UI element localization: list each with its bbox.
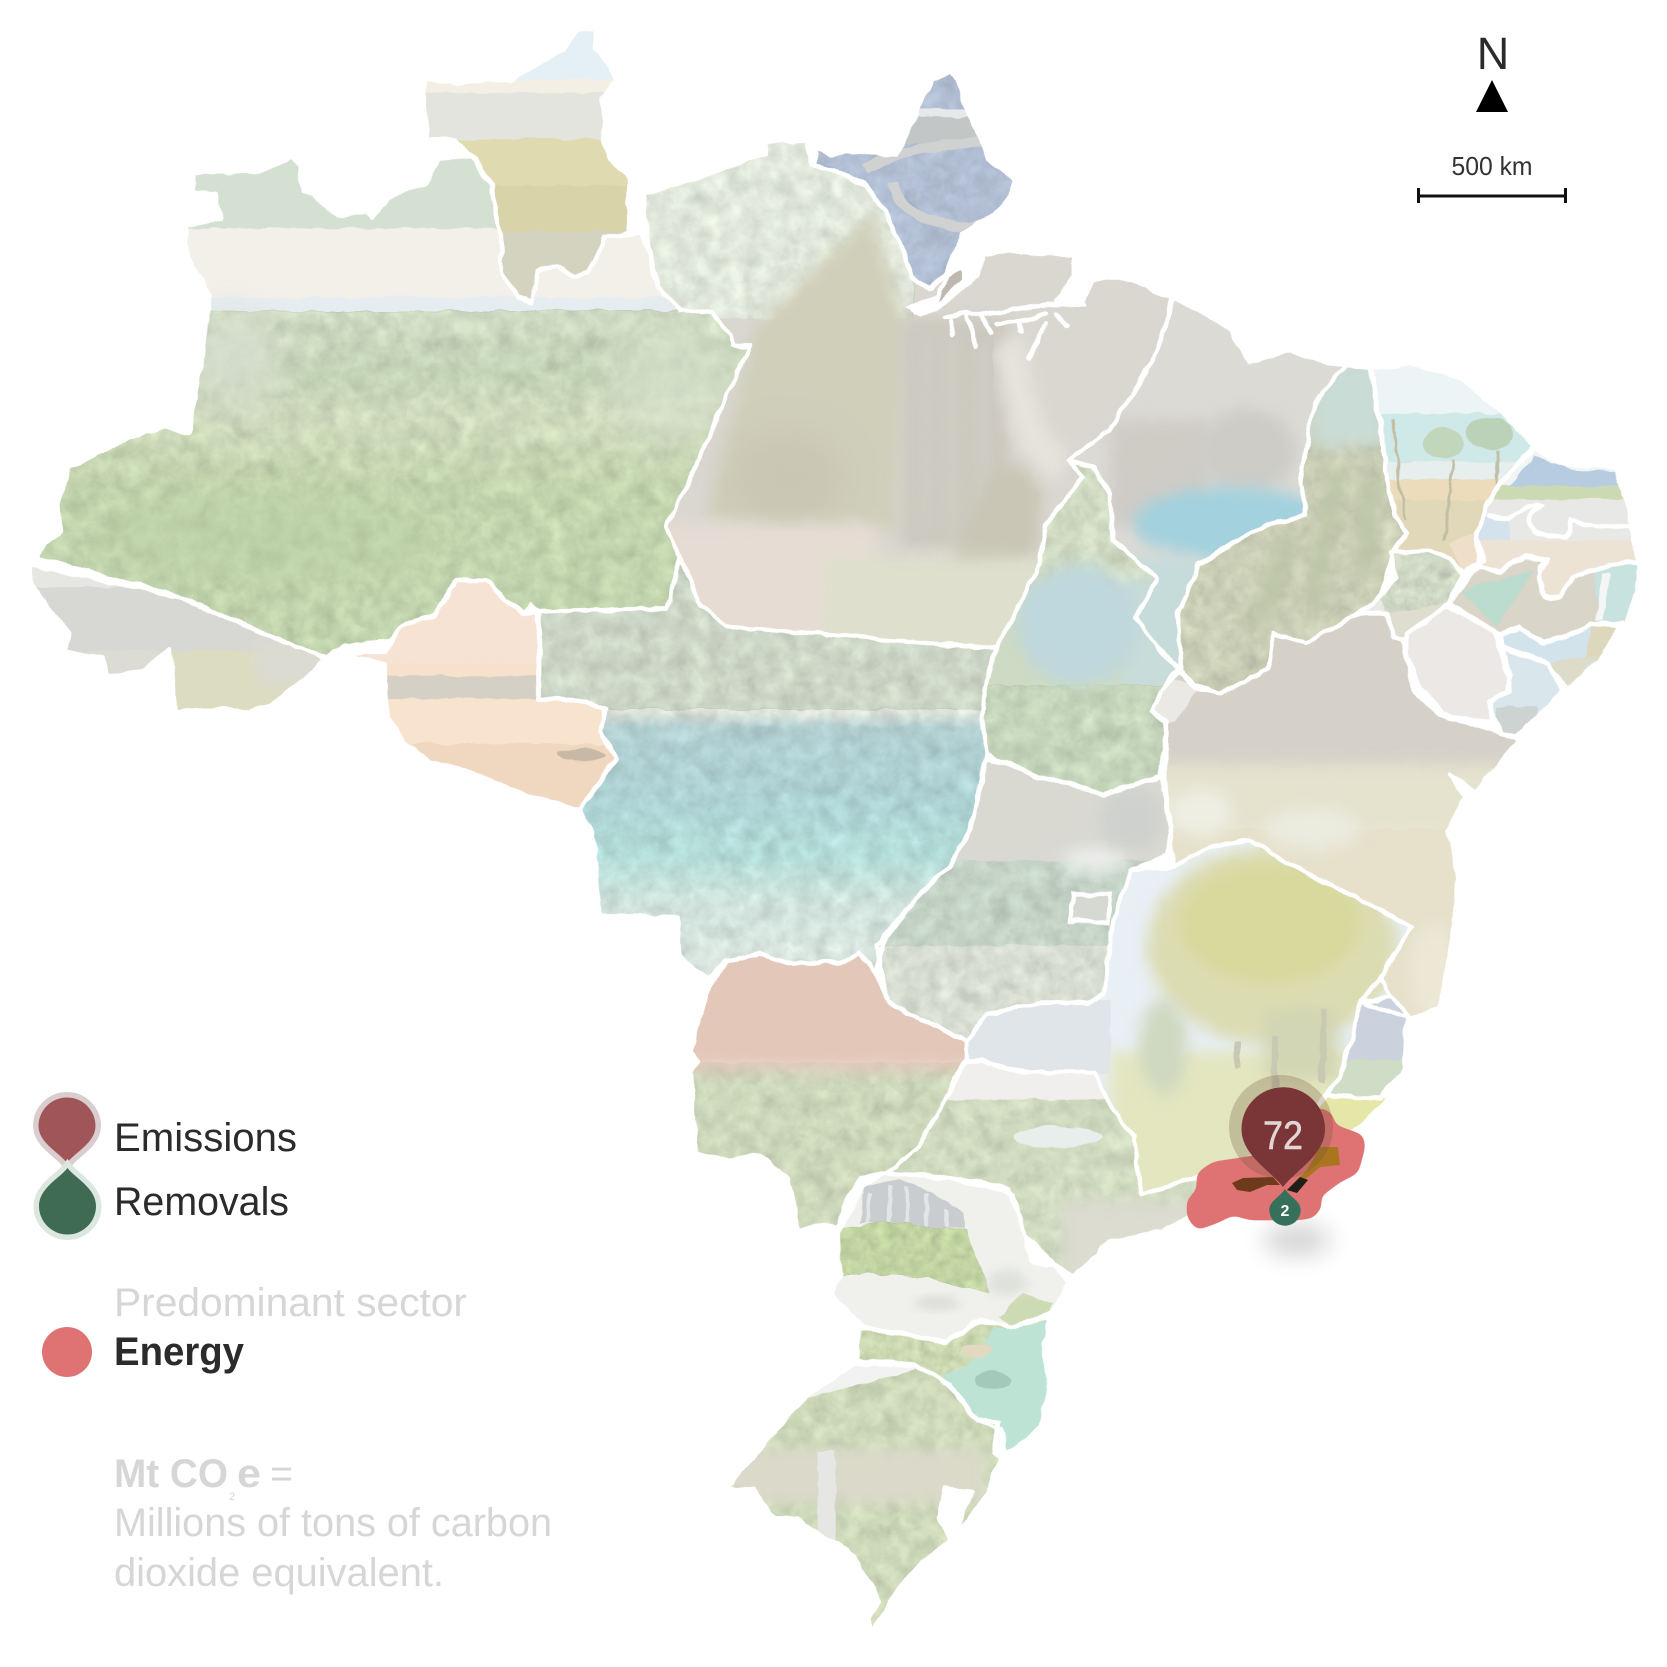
state: Tocantins xyxy=(983,464,1176,792)
state: Bahia xyxy=(1154,615,1516,1016)
state: Amapa xyxy=(816,74,1013,286)
emissions pin: 72 xyxy=(1263,1114,1303,1158)
state: Acre xyxy=(32,567,320,710)
state: Paraiba xyxy=(1447,553,1640,640)
note: unit definition: 2 xyxy=(229,1491,235,1503)
state: Rondonia xyxy=(354,582,615,808)
state: Rio de Janeiro xyxy=(1301,1096,1386,1146)
removals pin: 2 xyxy=(1281,1203,1290,1220)
note: unit definition xyxy=(114,1452,552,1595)
state: Rio Grande do Sul xyxy=(732,1366,999,1628)
scale bar xyxy=(1418,151,1566,203)
emissions pin xyxy=(1242,1087,1325,1187)
state: Maranhao xyxy=(1073,300,1342,664)
state: Espirito Santo xyxy=(1330,998,1406,1097)
state: Parana xyxy=(834,1175,1066,1340)
icon: energy dot xyxy=(42,1327,92,1377)
state: Piaui xyxy=(1180,367,1404,692)
municipality photo detail xyxy=(1232,1147,1340,1193)
note: unit definition: dioxide equivalent. xyxy=(114,1551,444,1595)
label: emissions: Emissions xyxy=(114,1116,297,1160)
state: Ceara xyxy=(1374,366,1530,570)
state: Pernambuco hinterland xyxy=(1360,547,1467,643)
northeast borders xyxy=(1360,364,1638,737)
state: pale central patch xyxy=(1407,605,1510,723)
state: Santa Catarina xyxy=(858,1320,1048,1450)
state: Pernambuco xyxy=(1497,620,1623,693)
legend: predominant sector xyxy=(42,1281,467,1377)
state: Goias xyxy=(879,762,1169,1038)
heading: Predominant sector xyxy=(114,1281,467,1325)
north arrow xyxy=(1476,28,1509,112)
state: Rio Grande do Norte xyxy=(1473,447,1643,600)
icon: removals drop xyxy=(39,1168,96,1234)
state: Para xyxy=(637,138,1179,653)
state: Minas Gerais xyxy=(962,834,1418,1206)
note: unit definition: e xyxy=(237,1452,261,1496)
icon: emissions drop xyxy=(38,1098,96,1163)
state: Roraima xyxy=(414,21,627,305)
Marajo island coastline xyxy=(905,220,1085,358)
state: Alagoas and Sergipe xyxy=(1487,647,1567,740)
state: Amazonas xyxy=(27,154,770,667)
removals pin xyxy=(1269,1189,1301,1226)
energy sector state highlight and pins xyxy=(1187,1075,1365,1256)
state: Federal District xyxy=(1070,894,1110,923)
state: Sao Paulo xyxy=(892,1062,1197,1274)
north arrow: N xyxy=(1477,28,1509,79)
note: unit definition: Mt CO xyxy=(114,1452,228,1496)
pin shadow xyxy=(1263,1224,1331,1256)
state: Parana and Santa Catarina borders xyxy=(832,1173,1068,1455)
label: energy: Energy xyxy=(114,1330,245,1374)
scale bar: 500 km xyxy=(1452,151,1532,181)
note: unit definition: = xyxy=(270,1452,293,1496)
northeast coastal states xyxy=(1360,360,1643,740)
label: removals: Removals xyxy=(114,1180,289,1224)
state: Mato Grosso do Sul xyxy=(692,956,965,1229)
legend: emissions and removals xyxy=(38,1098,297,1234)
note: unit definition: Millions of tons of carbon xyxy=(114,1501,552,1545)
emissions pin halo xyxy=(1229,1075,1333,1179)
state: Mato Grosso xyxy=(531,552,1009,985)
energy sector municipality cluster xyxy=(1187,1107,1365,1230)
